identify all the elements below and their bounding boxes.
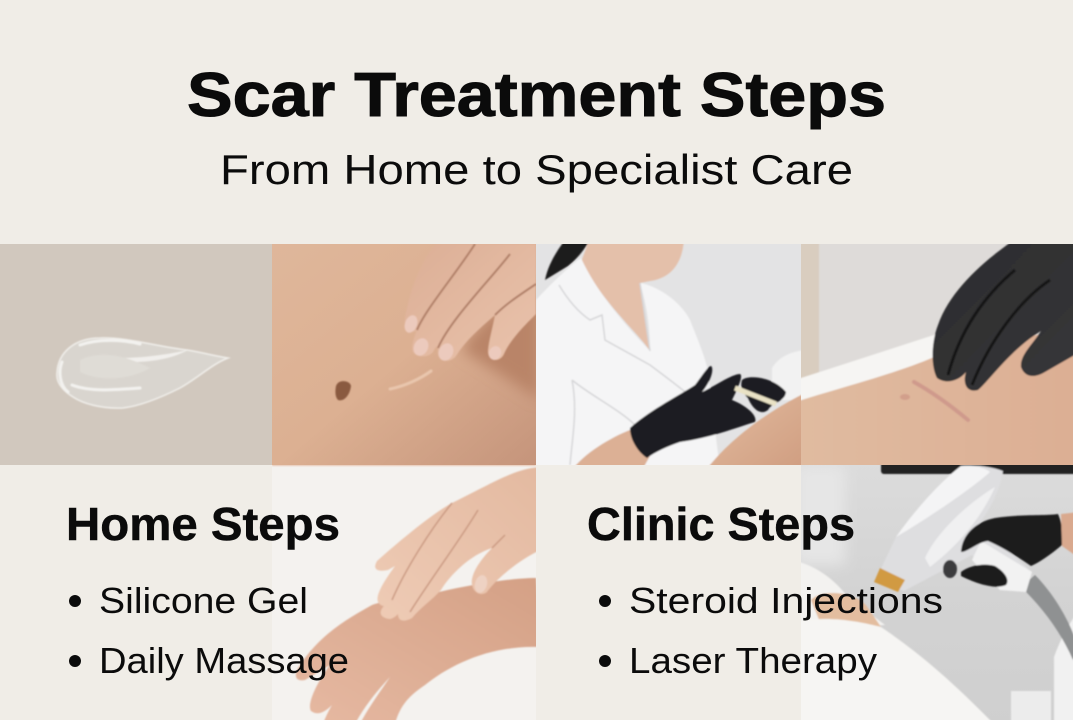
subtitle: From Home to Specialist Care	[220, 146, 853, 193]
heading: home steps: Home Steps	[66, 498, 340, 550]
bullet item: laser therapy: Laser Therapy	[629, 640, 877, 681]
bullet item: steroid injections: Steroid Injections	[629, 580, 943, 621]
panel: home steps	[66, 498, 349, 681]
photo: laser device treatment	[795, 459, 1073, 720]
photo: hands massaging	[266, 459, 542, 720]
panel: clinic steps	[587, 498, 943, 681]
photo: silicone gel swatch	[0, 244, 272, 465]
bullet item: daily massage: Daily Massage	[99, 640, 349, 681]
bullet item: silicone gel: Silicone Gel	[99, 580, 308, 621]
photo: clinician giving injection	[536, 244, 801, 465]
heading: clinic steps: Clinic Steps	[587, 498, 855, 550]
title: Scar Treatment Steps	[187, 61, 886, 130]
photo: abdomen with hand	[266, 238, 542, 471]
photo: gloved hand on scarred leg	[795, 238, 1073, 471]
